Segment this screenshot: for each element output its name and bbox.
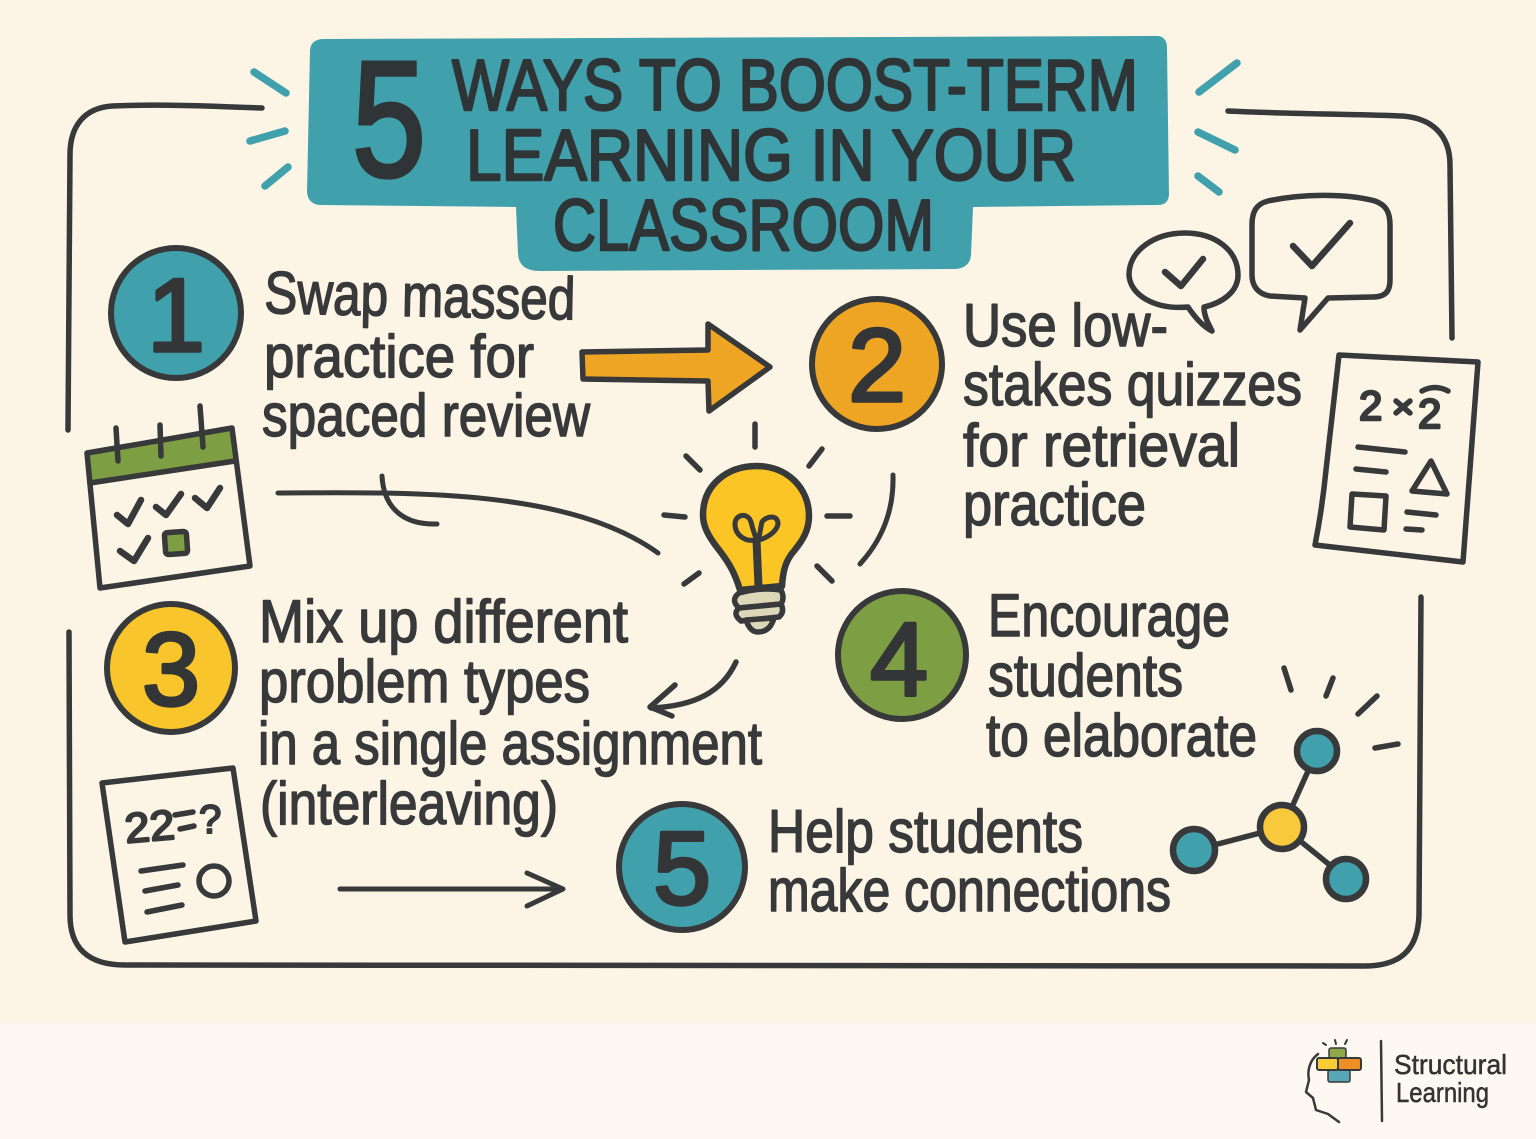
step 2 text: stakes quizzes <box>963 351 1302 418</box>
icon: light bulb <box>664 424 850 632</box>
connector curve <box>278 476 658 553</box>
step 5 badge <box>619 804 745 930</box>
logo: Structural Learning: Learning <box>1396 1077 1489 1108</box>
title rays left <box>250 72 288 186</box>
logo icon: head with blocks <box>1306 1040 1361 1122</box>
step 3 badge: 3 <box>142 612 200 728</box>
icon: worksheet: 22 <box>123 801 177 852</box>
icon: calendar <box>87 406 250 588</box>
step 3 text: Mix up different <box>259 588 628 655</box>
step 5 text <box>768 798 1171 924</box>
step 3 text: (interleaving) <box>260 770 558 837</box>
title text: WAYS TO BOOST-TERM <box>452 46 1138 126</box>
logo: Structural Learning <box>1306 1040 1507 1122</box>
step 3 text: problem types <box>259 648 590 715</box>
step 4 badge: 4 <box>870 602 928 718</box>
arrow: orange step 1 to 2 <box>582 324 770 411</box>
step 3 text: in a single assignment <box>258 710 762 777</box>
step 2 badge: 2 <box>848 308 906 424</box>
title text <box>452 46 1138 266</box>
step 3 text <box>258 588 762 837</box>
step 1 badge: 1 <box>147 258 205 374</box>
step 5 text: Help students <box>768 798 1083 865</box>
step 3 badge <box>107 604 235 732</box>
step 1 text: spaced review <box>262 382 591 449</box>
icon: worksheet <box>102 768 256 942</box>
title rays right <box>1198 63 1237 192</box>
step 2 text: for retrieval <box>963 412 1240 479</box>
icon: quiz paper: 2 <box>1359 382 1382 429</box>
step 5 text: make connections <box>768 857 1171 924</box>
title text: LEARNING IN YOUR <box>466 116 1076 196</box>
hand-drawn frame <box>68 105 1452 966</box>
icon: quiz paper <box>1315 355 1478 562</box>
step 1 text <box>262 259 591 449</box>
arrow: bulb to step 3 <box>650 662 736 716</box>
step 4 text: Encourage <box>988 582 1230 649</box>
title banner <box>307 27 1169 271</box>
step 4 badge <box>838 591 966 719</box>
step 4 text: to elaborate <box>986 702 1257 769</box>
step 1 badge <box>111 248 241 378</box>
step 1 text: practice for <box>264 323 534 390</box>
icon: worksheet: ? <box>199 798 221 842</box>
step 4 text: students <box>988 642 1183 709</box>
step 2 text: Use low- <box>963 292 1168 359</box>
title text: CLASSROOM <box>553 186 934 266</box>
connector curve right of bulb <box>860 475 893 564</box>
step 2 badge <box>812 299 942 429</box>
title: numeral 5: 5 <box>352 27 426 211</box>
step 1 text: Swap massed <box>264 259 576 333</box>
step 4 text <box>986 582 1257 769</box>
icon: quiz paper: 2 <box>1418 390 1441 437</box>
icon: small speech bubble <box>1129 233 1238 331</box>
step 2 text <box>963 292 1302 538</box>
arrow: step 3 to 5 <box>340 873 563 906</box>
icon: network <box>1173 668 1398 899</box>
icon: large speech bubble <box>1252 195 1390 330</box>
logo: Structural Learning: Structural <box>1394 1049 1507 1080</box>
step 2 text: practice <box>963 471 1146 538</box>
step 5 badge: 5 <box>653 811 711 927</box>
